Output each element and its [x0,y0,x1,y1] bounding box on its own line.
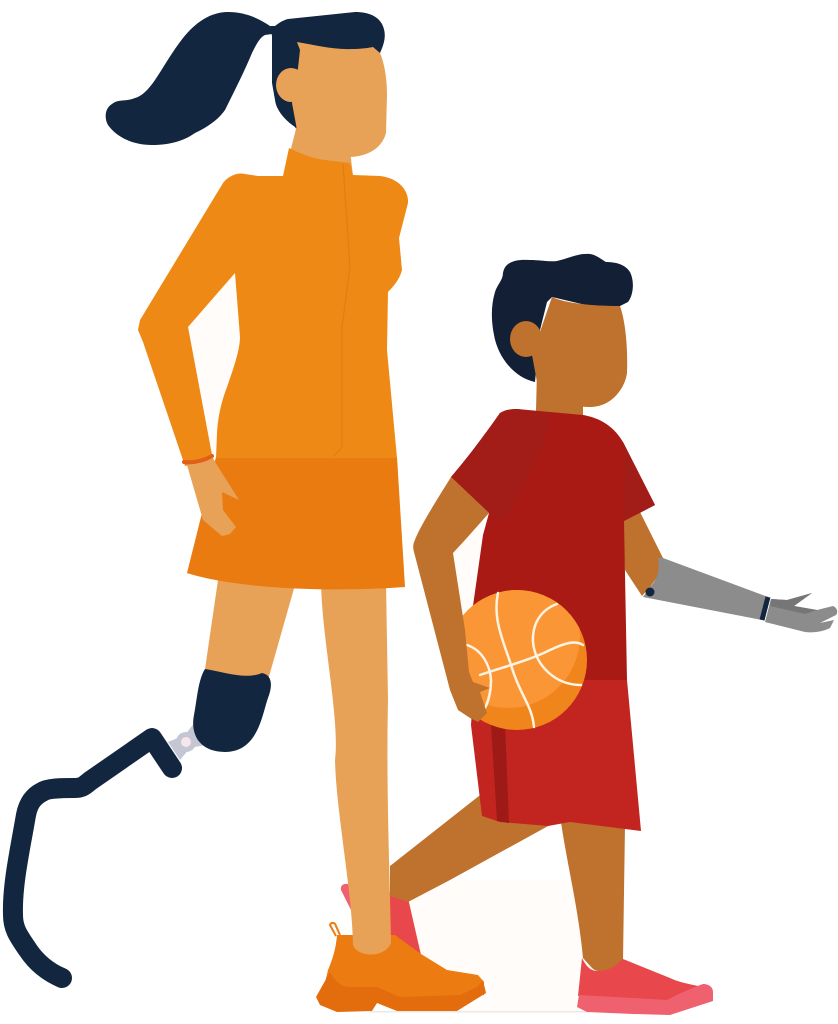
running blade [13,738,172,978]
boy front shoe [577,958,713,1015]
woman top hair [270,12,385,53]
woman hand [187,458,239,536]
boy front leg [560,815,625,971]
boy right arm skin [622,512,663,596]
basketball [462,590,587,730]
woman bracelet [184,456,212,462]
woman back hair [272,30,305,132]
woman neck [284,125,353,176]
prosthetic arm [643,558,837,632]
boy left arm and hand [413,477,490,722]
woman top [138,148,408,466]
woman standing leg [321,582,391,955]
boy shirt [451,409,655,680]
woman face [276,42,387,158]
prosthetic socket [193,669,271,752]
woman skirt [187,457,405,589]
boy head [492,254,633,407]
woman shoe [316,923,486,1012]
boy back leg [390,792,550,902]
boy neck [536,370,583,416]
boy back shoe [341,884,421,955]
prosthetic knee joint [168,722,205,760]
boy shorts [471,680,641,831]
woman ponytail [106,12,272,145]
figure: boy [341,254,837,1015]
woman bent thigh [204,580,295,680]
figure: woman [13,12,486,1012]
